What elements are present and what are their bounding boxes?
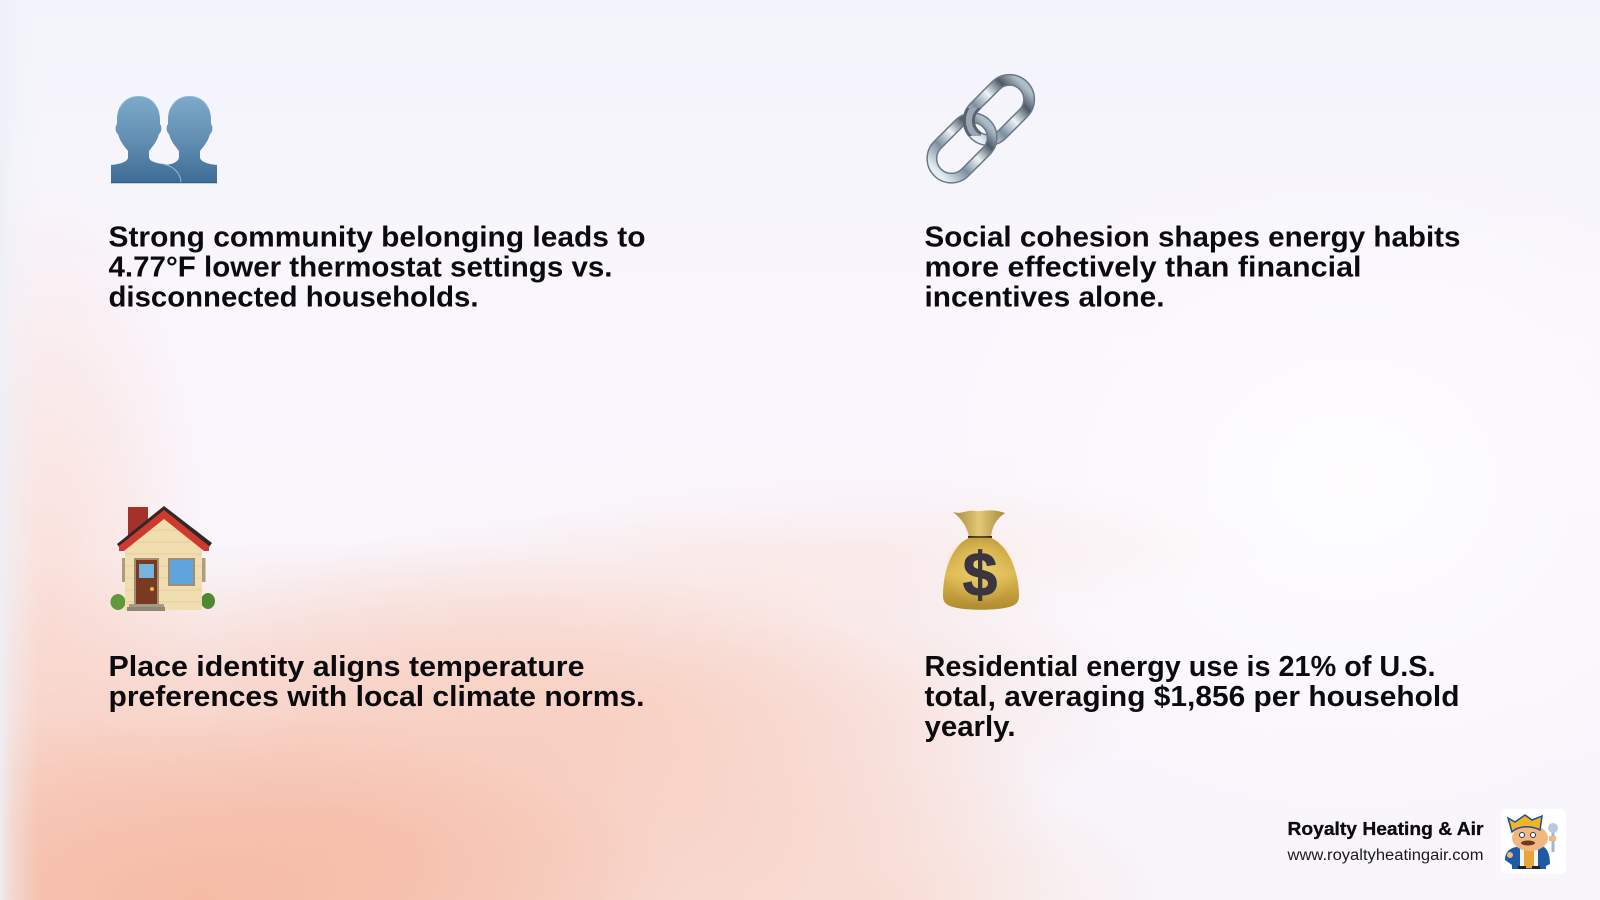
icon: two people silhouettes: [111, 96, 217, 183]
text block: community belonging: [108, 222, 646, 314]
icon: chain link: [924, 72, 1037, 186]
text block: place identity: preferences with local climate norms.: [108, 681, 644, 713]
text block: residential energy: yearly.: [924, 711, 1016, 743]
text block: social cohesion: incentives alone.: [924, 282, 1164, 314]
text block: social cohesion: [924, 222, 1460, 314]
icon: house: [110, 506, 215, 611]
text block: place identity: Place identity aligns temperature: [108, 651, 584, 683]
text block: residential energy: Residential energy use is 21% of U.S.: [924, 651, 1436, 683]
text block: residential energy: [924, 651, 1460, 743]
text block: residential energy: total, averaging $1,856 per household: [924, 681, 1460, 713]
text block: community belonging: 4.77°F lower thermostat settings vs.: [108, 252, 612, 284]
icon: money bag: $: [963, 541, 997, 610]
logo: royal mascot: [1501, 809, 1566, 874]
text block: social cohesion: Social cohesion shapes energy habits: [924, 222, 1460, 254]
text block: social cohesion: more effectively than financial: [924, 252, 1362, 284]
icon: money bag: [943, 510, 1019, 610]
text block: community belonging: Strong community belonging leads to: [108, 222, 646, 254]
text block: place identity: [108, 651, 644, 713]
footer brand text: www.royaltyheatingair.com: [1286, 847, 1484, 864]
footer brand text: [1286, 818, 1484, 864]
text block: community belonging: disconnected households.: [108, 282, 478, 314]
footer brand text: Royalty Heating & Air: [1288, 818, 1484, 839]
